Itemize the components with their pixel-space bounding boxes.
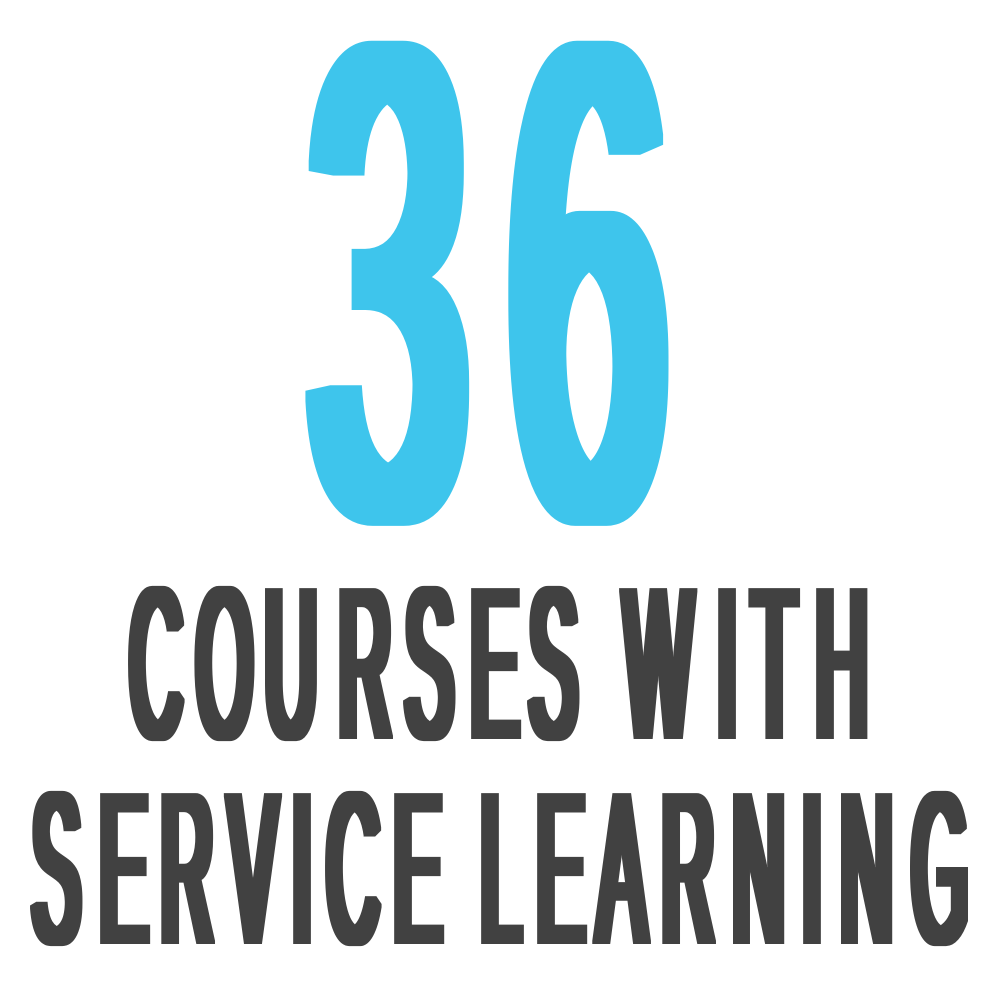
heading line: COURSES WITH: COURSES WITH (130, 543, 868, 783)
heading line: SERVICE LEARNING: SERVICE LEARNING (32, 748, 968, 988)
